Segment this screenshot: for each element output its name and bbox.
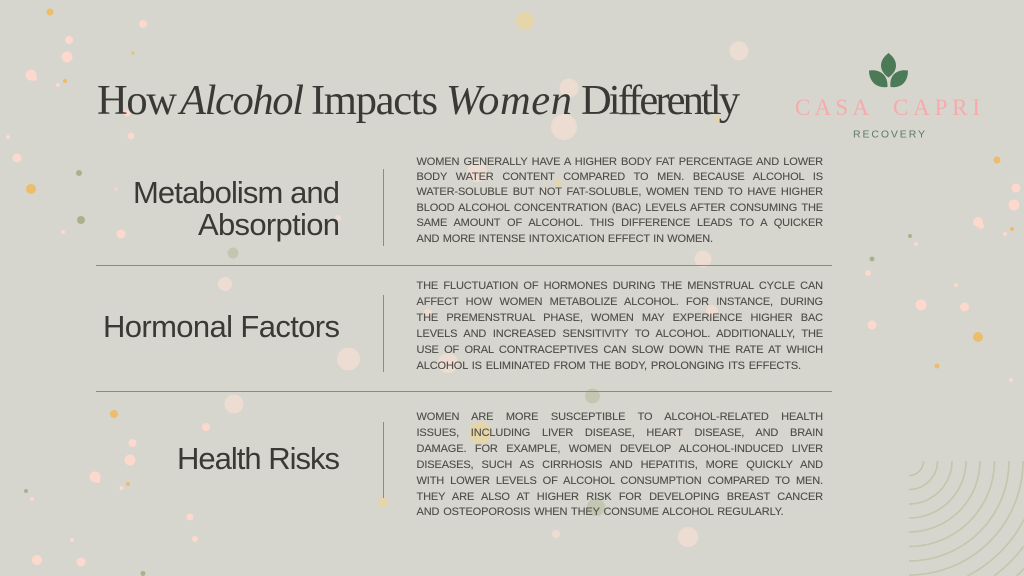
title: [97, 77, 741, 124]
text block: health risks: DISEASES, SUCH AS CIRRHOSIS AND HEPATITIS, MORE QUICKLY AND: [416, 459, 823, 471]
horizontal rule: [96, 265, 832, 266]
heading: hormonal factors: Hormonal Factors: [103, 309, 340, 344]
title: Women: [446, 77, 572, 124]
text block: metabolism and absorption: WOMEN GENERALLY HAVE A HIGHER BODY FAT PERCENTAGE AND LOWER: [416, 156, 823, 168]
brand name: CAPRI: [893, 95, 980, 120]
text block: hormonal factors: [416, 280, 823, 372]
text block: health risks: WOMEN ARE MORE SUSCEPTIBLE TO ALCOHOL-RELATED HEALTH: [416, 411, 823, 423]
text block: metabolism and absorption: SAME AMOUNT OF ALCOHOL. THIS DIFFERENCE LEADS TO A QUICKER: [416, 217, 823, 229]
text block: hormonal factors: AFFECT HOW WOMEN METABOLIZE ALCOHOL. FOR INSTANCE, DURING: [416, 296, 823, 308]
text block: hormonal factors: ALCOHOL IS ELIMINATED FROM THE BODY, PROLONGING ITS EFFECTS.: [416, 360, 801, 372]
heading: metabolism and absorption: [133, 175, 340, 242]
text block: health risks: DAMAGE. FOR EXAMPLE, WOMEN DEVELOP ALCOHOL-INDUCED LIVER: [416, 443, 823, 455]
vertical divider: health risks: [383, 422, 384, 498]
text block: hormonal factors: USE OF ORAL CONTRACEPTIVES CAN SLOW DOWN THE RATE AT WHICH: [416, 344, 823, 356]
text block: health risks: AND OSTEOPOROSIS WHEN THEY CONSUME ALCOHOL REGULARLY.: [416, 506, 784, 518]
brand name: CASA: [795, 95, 869, 120]
heading: metabolism and absorption: Absorption: [198, 207, 340, 242]
text block: health risks: WITH LOWER LEVELS OF ALCOHOL CONSUMPTION COMPARED TO MEN.: [416, 475, 823, 487]
logo: Casa Capri Recovery: [795, 53, 980, 140]
horizontal rule: [96, 391, 832, 392]
title: How: [97, 77, 177, 124]
title: Impacts: [311, 77, 438, 124]
text block: hormonal factors: LEVELS AND INCREASED SENSITIVITY TO ALCOHOL. ADDITIONALLY, THE: [416, 328, 823, 340]
text block: hormonal factors: THE PREMENSTRUAL PHASE, WOMEN MAY EXPERIENCE HIGHER BAC: [416, 312, 823, 324]
heading: health risks: Health Risks: [177, 441, 340, 476]
heading: metabolism and absorption: Metabolism and: [133, 175, 340, 210]
text block: metabolism and absorption: [416, 156, 823, 245]
title: Alcohol: [177, 77, 304, 124]
text block: metabolism and absorption: AND MORE INTENSE INTOXICATION EFFECT IN WOMEN.: [416, 233, 713, 245]
text block: health risks: ISSUES, INCLUDING LIVER DISEASE, HEART DISEASE, AND BRAIN: [416, 427, 823, 439]
text block: hormonal factors: THE FLUCTUATION OF HORMONES DURING THE MENSTRUAL CYCLE CAN: [416, 280, 823, 292]
text block: metabolism and absorption: WATER-SOLUBLE BUT NOT FAT-SOLUBLE, WOMEN TEND TO HAVE HIGHER: [416, 186, 823, 198]
title: Differently: [581, 77, 741, 124]
text block: metabolism and absorption: BODY WATER CONTENT COMPARED TO MEN. BECAUSE ALCOHOL IS: [416, 171, 823, 183]
text block: health risks: THEY ARE ALSO AT HIGHER RISK FOR DEVELOPING BREAST CANCER: [416, 491, 823, 503]
brand tagline: RECOVERY: [853, 128, 925, 140]
vertical divider: hormonal: [383, 295, 384, 372]
vertical divider: metabolism: [383, 169, 384, 246]
brand name: [795, 95, 980, 120]
text block: metabolism and absorption: BLOOD ALCOHOL CONCENTRATION (BAC) LEVELS AFTER CONSUMING THE: [416, 202, 823, 214]
icon: three leaves: [869, 53, 908, 87]
text block: health risks: [416, 411, 823, 518]
